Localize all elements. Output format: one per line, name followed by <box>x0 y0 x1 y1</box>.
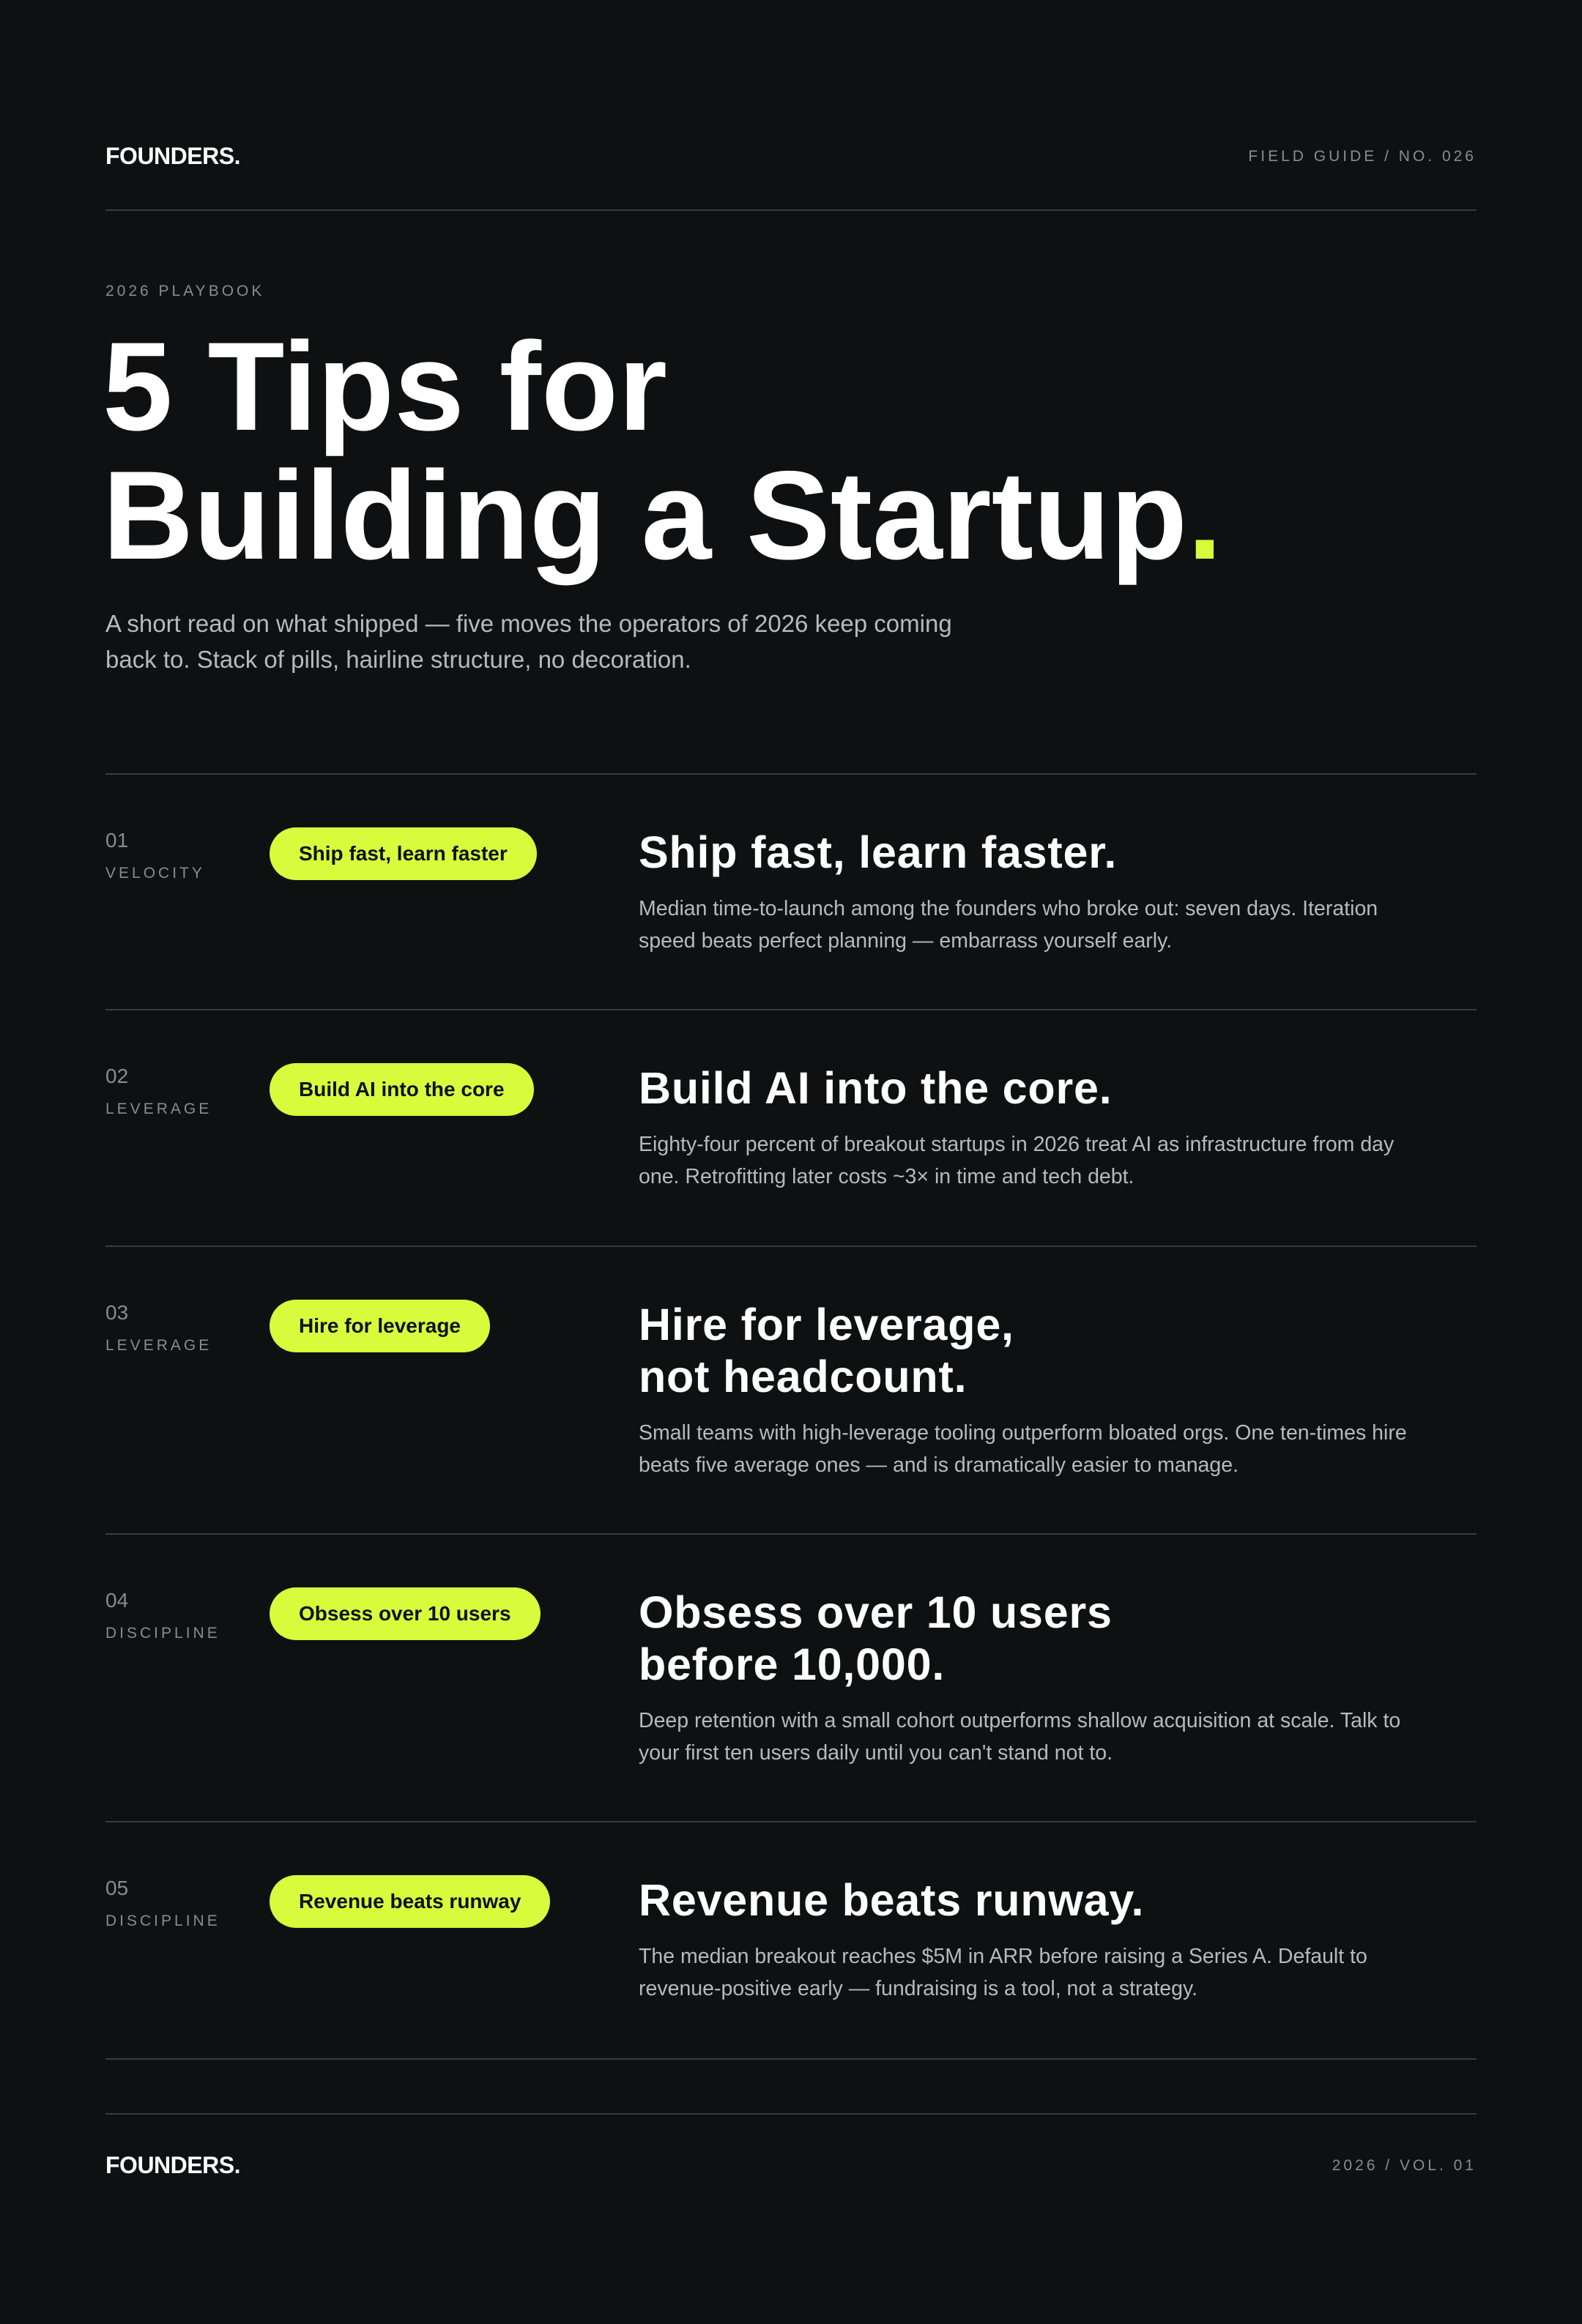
header logo: FOUNDERS. <box>105 143 240 169</box>
pill 02 <box>270 1063 534 1116</box>
heading 03: not headcount. <box>639 1352 967 1401</box>
heading 05: Revenue beats runway. <box>639 1875 1144 1925</box>
heading 03 <box>639 1300 1014 1401</box>
body 04: Deep retention with a small cohort outperforms shallow acquisition at scale. Talk to your first ten users daily until you can't stand not to. <box>639 1709 1400 1765</box>
heading 04: before 10,000. <box>639 1639 945 1689</box>
tip 05 <box>105 1875 1367 2000</box>
tip 03 <box>105 1300 1407 1477</box>
body 01: Median time-to-launch among the founders who broke out: seven days. Iteration speed beats perfect planning — embarrass yourself early. <box>639 897 1378 953</box>
tip 01 <box>105 827 1378 953</box>
heading 01: Ship fast, learn faster. <box>639 827 1117 877</box>
pill 03: Hire for leverage <box>299 1314 461 1337</box>
title <box>103 316 1222 586</box>
pill 05 <box>270 1875 550 1928</box>
title: 5 Tips for <box>103 316 667 457</box>
tip 04: 04 <box>105 1589 128 1612</box>
body 02: Eighty-four percent of breakout startups in 2026 treat AI as infrastructure from day one. Retrofitting later costs ~3× in time and tech debt. <box>639 1133 1394 1188</box>
footer logo: FOUNDERS. <box>105 2152 240 2178</box>
body 05: The median breakout reaches $5M in ARR before raising a Series A. Default to revenue-positive early — fundraising is a tool, not a strategy. <box>639 1945 1367 2000</box>
heading 04: Obsess over 10 users <box>639 1587 1113 1637</box>
footer meta: 2026 / VOL. 01 <box>1332 2157 1477 2174</box>
tip 05: DISCIPLINE <box>105 1913 220 1929</box>
header meta: FIELD GUIDE / NO. 026 <box>1248 148 1477 165</box>
tip 03: LEVERAGE <box>105 1337 212 1354</box>
pill 01 <box>270 827 537 880</box>
tip 02: LEVERAGE <box>105 1100 212 1117</box>
tip 02 <box>105 1063 1395 1188</box>
body 03: Small teams with high-leverage tooling outperform bloated orgs. One ten-times hire beats five average ones — and is dramatically easier to manage. <box>639 1421 1407 1477</box>
pill 05: Revenue beats runway <box>299 1890 521 1913</box>
pill 04 <box>270 1587 541 1640</box>
tip 04: DISCIPLINE <box>105 1625 220 1642</box>
tip 03: 03 <box>105 1301 128 1324</box>
pill 03 <box>270 1300 490 1352</box>
tip 02: 02 <box>105 1065 128 1087</box>
pill 02: Build AI into the core <box>299 1078 505 1100</box>
tip 05: 05 <box>105 1877 128 1899</box>
tip 01: VELOCITY <box>105 865 205 882</box>
subtitle: A short read on what shipped — five moves the operators of 2026 keep coming back to. Stack of pills, hairline structure, no decoration. <box>105 610 952 673</box>
eyebrow: 2026 PLAYBOOK <box>105 283 264 299</box>
heading 03: Hire for leverage, <box>639 1300 1014 1349</box>
tip 04 <box>105 1587 1400 1765</box>
title: Building a Startup. <box>103 445 1222 586</box>
pill 01: Ship fast, learn faster <box>299 842 508 865</box>
pill 04: Obsess over 10 users <box>299 1602 511 1625</box>
heading 02: Build AI into the core. <box>639 1063 1112 1113</box>
tip 01: 01 <box>105 829 128 852</box>
heading 04 <box>639 1587 1113 1689</box>
